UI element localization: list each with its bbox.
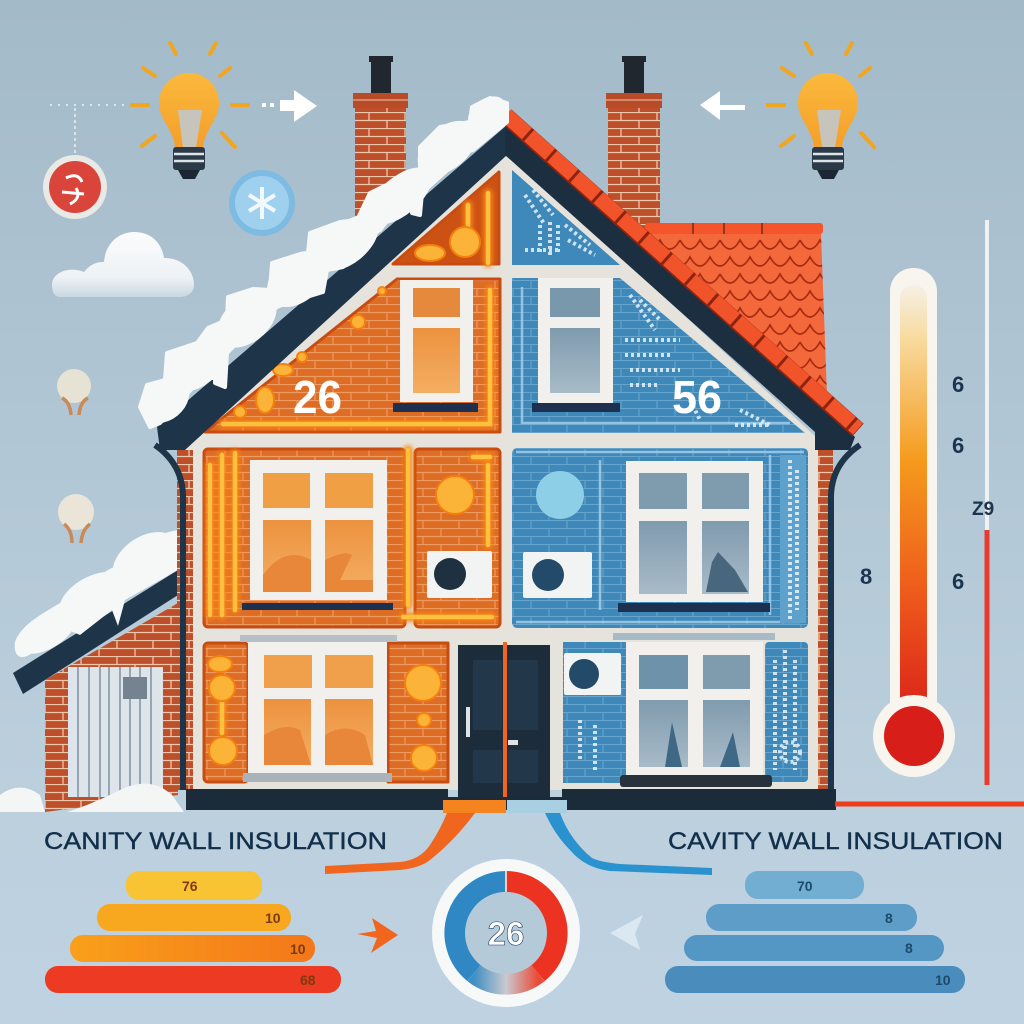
cool bars: 70 <box>797 878 813 894</box>
left heading: CANITY WALL INSULATION <box>44 828 387 855</box>
chimney left <box>353 56 408 218</box>
warm glowing orbs <box>208 227 480 771</box>
cool bars: 10 <box>935 972 951 988</box>
side shed <box>10 521 188 812</box>
main roof <box>157 115 858 450</box>
right heading: CAVITY WALL INSULATION <box>668 828 1003 855</box>
cold circular icon <box>536 471 584 519</box>
warm bars: 10 <box>265 910 281 926</box>
house body <box>177 150 833 790</box>
left light bulb with arrow <box>50 43 317 179</box>
thermometer scale numbers: 8 <box>860 564 872 589</box>
chimney right <box>606 56 662 233</box>
warm heating glow lines <box>210 193 492 733</box>
window sills <box>242 403 772 787</box>
thermometer scale numbers: 6 <box>952 372 964 397</box>
thermometer <box>873 268 955 777</box>
thermometer scale numbers: 6 <box>952 569 964 594</box>
front door <box>458 642 550 800</box>
blue snow badge <box>229 170 295 236</box>
air conditioner units <box>427 551 621 695</box>
cool wall frost decoration <box>525 190 800 770</box>
cool arrow <box>610 915 643 950</box>
cloud <box>52 232 194 297</box>
warm bars: 76 <box>182 878 198 894</box>
thin scale thermometer <box>985 220 989 785</box>
right light bulb with arrow <box>700 43 874 179</box>
warm bars: 68 <box>300 972 316 988</box>
cool bars <box>665 871 965 993</box>
foundation <box>186 789 836 810</box>
cool bars: 8 <box>885 910 893 926</box>
cool side panels <box>512 170 808 783</box>
thermometer scale numbers: 6 <box>952 433 964 458</box>
warm side panels <box>204 172 500 782</box>
temperature labels on walls: 26 <box>293 371 342 423</box>
snow ground <box>0 784 184 812</box>
downpipes <box>155 445 860 790</box>
warm windows <box>240 280 473 782</box>
warm arrow <box>357 918 398 953</box>
temperature labels on walls: 56 <box>672 371 722 423</box>
central gauge <box>432 859 580 1007</box>
red heat badge <box>43 108 107 219</box>
rear tiled roof <box>640 223 827 395</box>
insulation flow lines <box>325 800 1024 875</box>
small bulb icons <box>57 369 94 543</box>
warm bars <box>45 871 341 993</box>
snow on roof <box>131 89 512 433</box>
temperature labels on walls <box>293 371 722 423</box>
warm bars: 10 <box>290 941 306 957</box>
cool windows <box>538 278 775 775</box>
cool bars: 8 <box>905 940 913 956</box>
thermometer scale numbers <box>860 372 994 594</box>
thermometer scale numbers: Z9 <box>972 499 994 520</box>
central gauge: 26 <box>488 915 524 952</box>
